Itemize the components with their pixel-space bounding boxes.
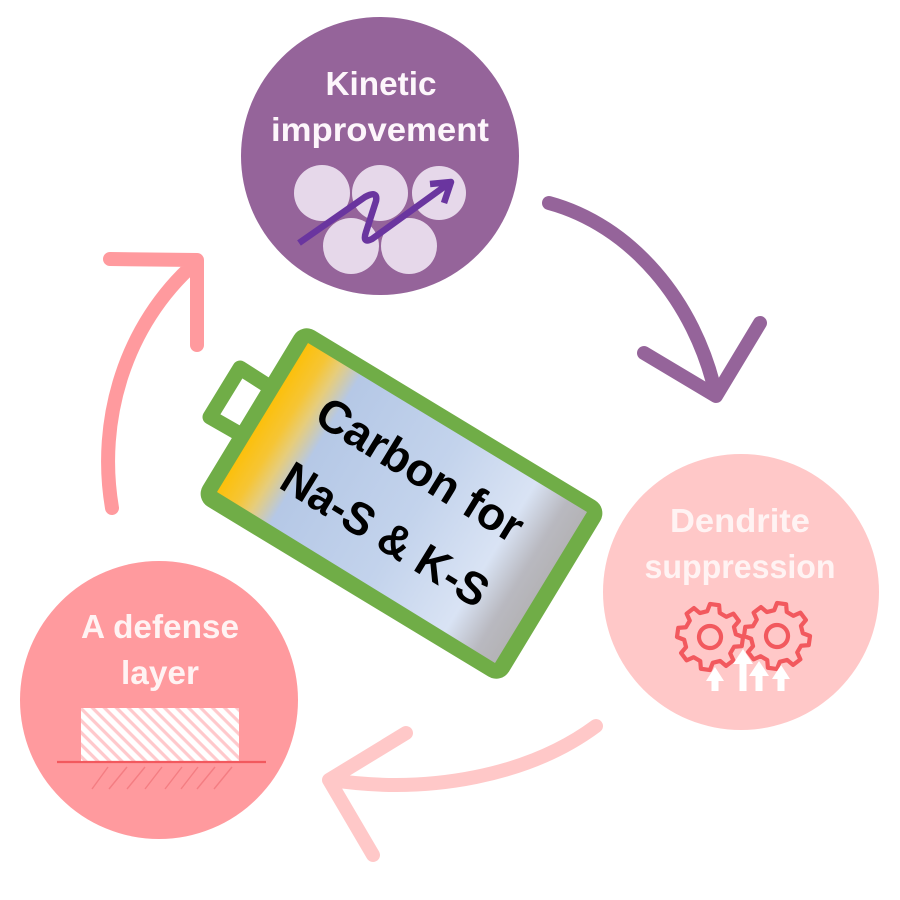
heading: a defense layer: A defense [81, 608, 239, 645]
heading: kinetic improvement: Kinetic [326, 65, 436, 102]
battery label: Na-S & K-S [272, 451, 499, 618]
panel: kinetic improvement [241, 17, 519, 295]
heading: dendrite suppression [644, 502, 836, 585]
arrow: purple [549, 203, 760, 396]
heading: a defense layer [81, 608, 239, 691]
battery label [272, 386, 534, 618]
icon: gears with arrows [673, 599, 814, 691]
heading: dendrite suppression: Dendrite [670, 502, 810, 539]
heading: kinetic improvement [271, 65, 489, 148]
heading: a defense layer: layer [121, 654, 199, 691]
battery [195, 323, 608, 684]
arrow: salmon [108, 259, 197, 508]
battery terminal [210, 368, 276, 437]
heading: kinetic improvement: improvement [271, 111, 489, 148]
icon: particles with zigzag arrow [294, 165, 466, 274]
battery casing [195, 323, 608, 684]
icon: protective layer on surface [57, 708, 266, 789]
battery body [217, 343, 587, 663]
panel: dendrite suppression [603, 454, 879, 730]
battery label: Carbon for [307, 386, 534, 553]
panel: a defense layer [20, 561, 298, 839]
heading: dendrite suppression: suppression [644, 548, 836, 585]
arrow: pink [329, 726, 596, 855]
